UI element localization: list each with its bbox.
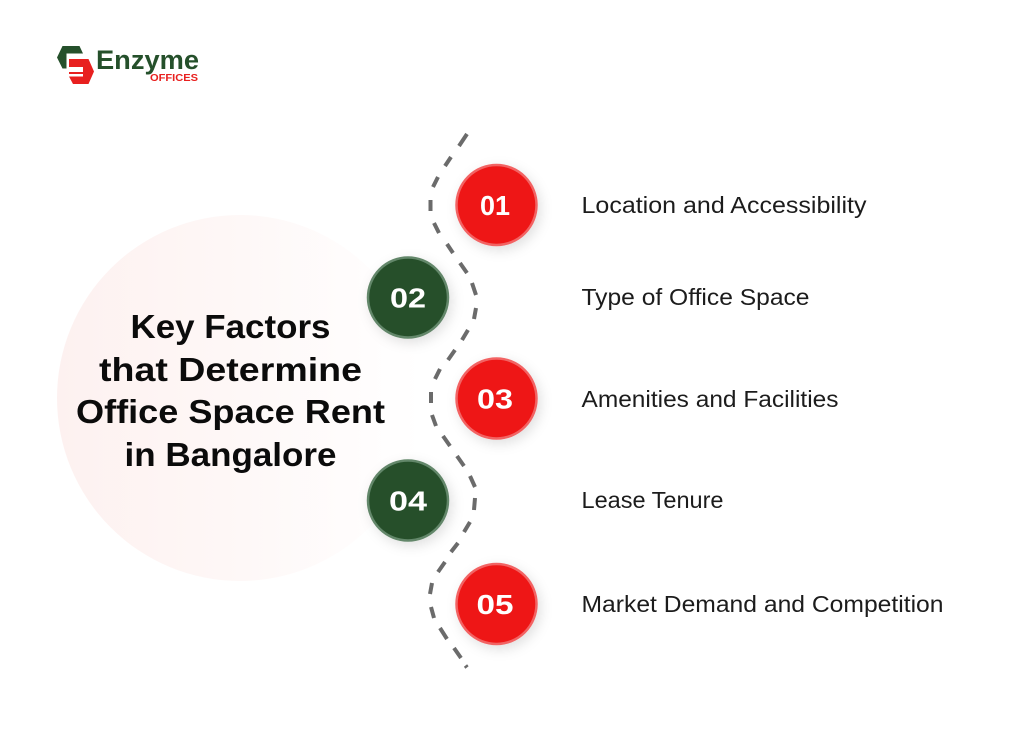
- label 02: Type of Office Space: [582, 284, 810, 310]
- logo wordmark: Enzyme: [96, 45, 199, 75]
- badge 02: 02: [390, 282, 426, 314]
- step 05: [456, 564, 944, 644]
- logo: Enzyme Offices: [57, 45, 199, 84]
- badge 05: [456, 564, 536, 644]
- title: [76, 308, 385, 473]
- badge 05: 05: [476, 589, 514, 620]
- label 04: Lease Tenure: [582, 487, 724, 513]
- title: that Determine: [99, 351, 362, 388]
- badge 01: 01: [480, 190, 510, 221]
- badge 04: 04: [389, 486, 428, 516]
- label 03: Amenities and Facilities: [582, 386, 838, 412]
- label 01: Location and Accessibility: [582, 192, 867, 218]
- title: Key Factors: [130, 308, 330, 345]
- badge 03: [456, 358, 536, 438]
- badge 04: [368, 460, 448, 540]
- dashed wavy connector: [430, 134, 476, 668]
- logo icon: hexagons: [57, 46, 94, 84]
- label 05: Market Demand and Competition: [582, 591, 944, 617]
- background circle: [57, 215, 423, 581]
- step 02: [368, 258, 810, 338]
- badge 01: [456, 165, 536, 245]
- title: in Bangalore: [124, 436, 336, 473]
- step 03: [456, 358, 838, 438]
- step 04: [368, 460, 724, 540]
- badge 02: [368, 258, 448, 338]
- badge 03: 03: [477, 384, 513, 414]
- title: Office Space Rent: [76, 393, 385, 430]
- logo subtitle: OFFICES: [150, 72, 198, 84]
- step 01: [456, 165, 867, 245]
